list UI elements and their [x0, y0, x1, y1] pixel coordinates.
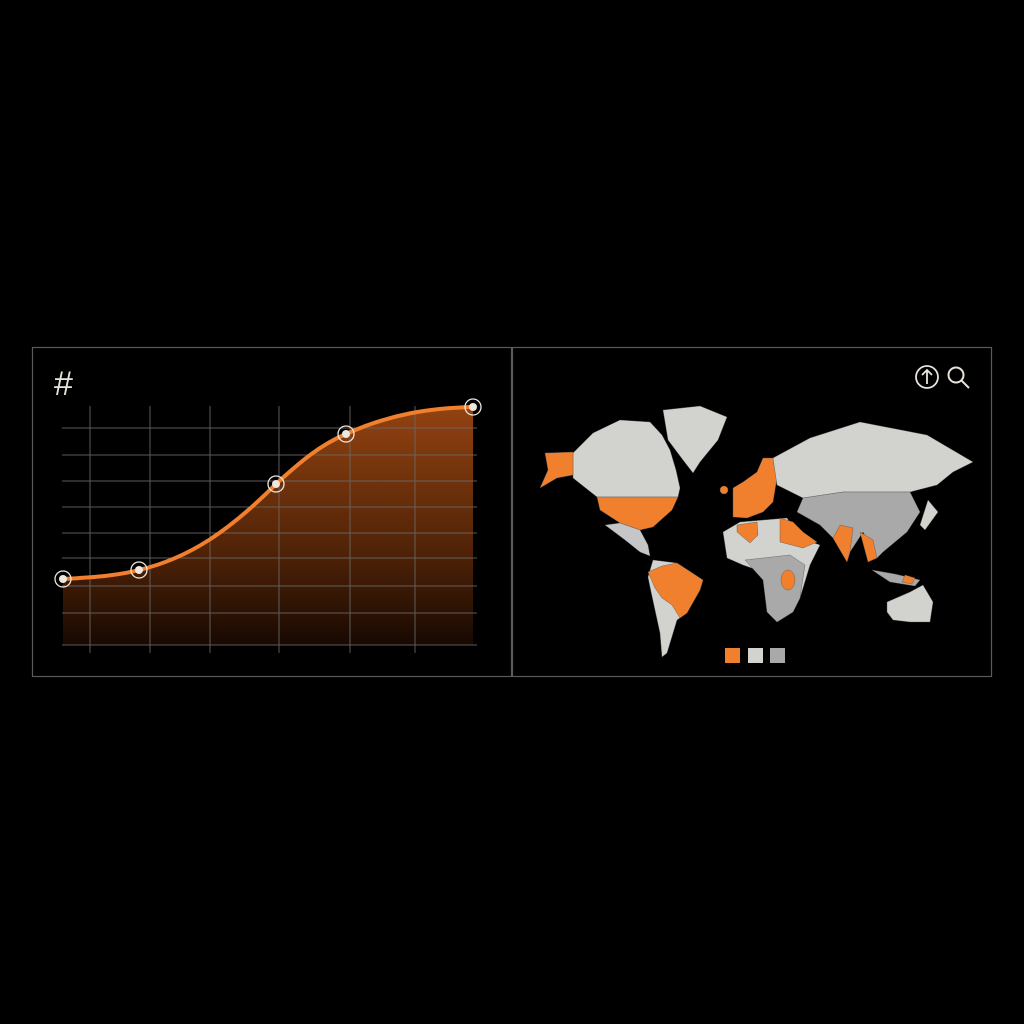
line series: [63, 407, 473, 579]
icon: hash symbol: #: [54, 365, 73, 403]
panel: line chart: [32, 348, 512, 676]
map shapes: [540, 406, 973, 657]
icon: upload circle: [916, 366, 938, 388]
area fill: [63, 407, 473, 645]
icon: search: [948, 368, 969, 388]
panel: world map: [512, 348, 992, 676]
legend: [725, 648, 785, 663]
data points: [59, 403, 477, 583]
